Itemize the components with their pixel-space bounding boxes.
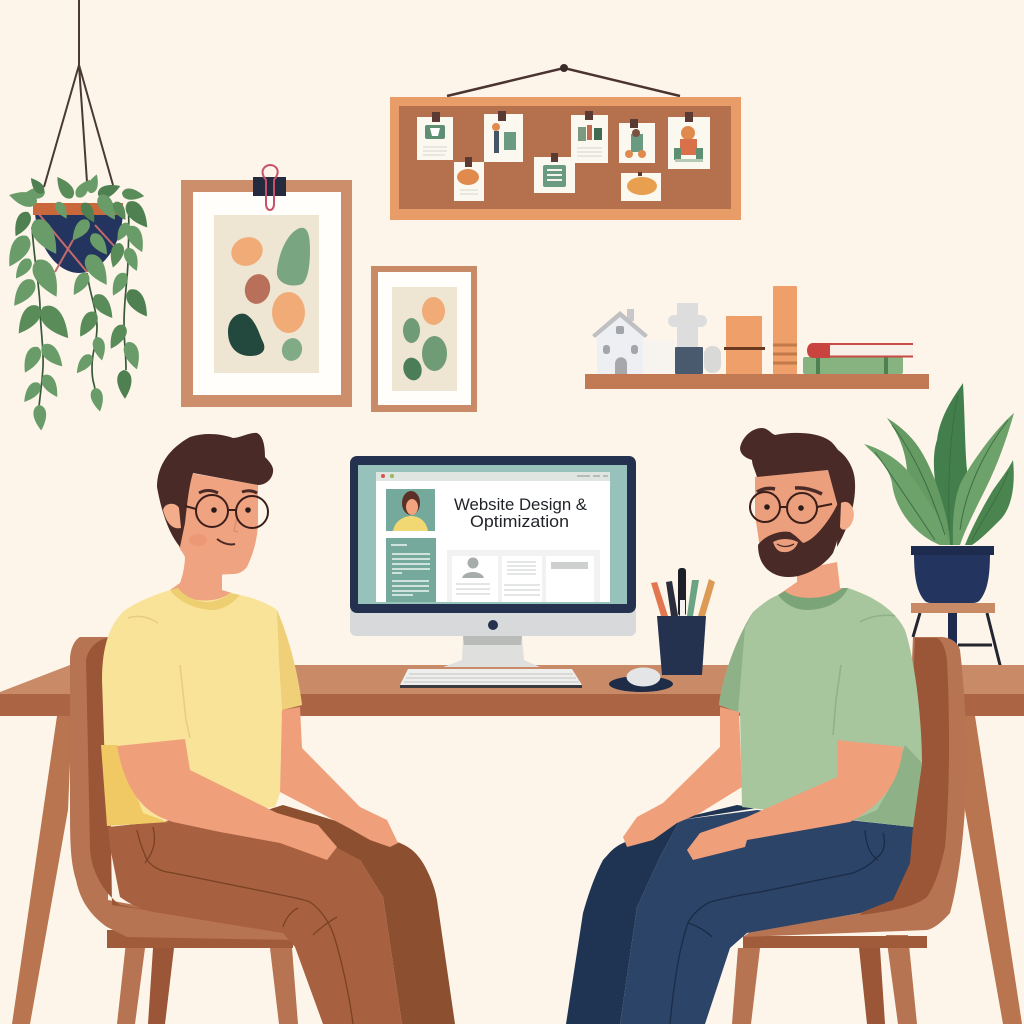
photo card 3 bbox=[454, 157, 484, 201]
cork board bbox=[390, 64, 741, 220]
plant stool bbox=[911, 603, 1002, 673]
trousers bbox=[108, 805, 455, 1024]
photo card 7 bbox=[621, 172, 661, 201]
potted plant bbox=[864, 383, 1014, 673]
photo card 4 bbox=[534, 153, 575, 193]
photo card 8 bbox=[668, 112, 710, 169]
head bbox=[157, 433, 273, 575]
tall orange box bbox=[773, 286, 797, 374]
small framed art bbox=[371, 266, 477, 412]
right chair bbox=[732, 637, 966, 1024]
green t-shirt bbox=[719, 588, 922, 827]
sculpture on cup bbox=[668, 303, 721, 374]
glasses bbox=[185, 495, 268, 528]
orange box bbox=[724, 316, 765, 374]
monitor stand bbox=[443, 636, 540, 667]
beard bbox=[758, 503, 840, 577]
hanging plant bbox=[2, 0, 154, 431]
icon: model house bbox=[592, 309, 675, 374]
large framed art bbox=[181, 165, 352, 407]
right person bbox=[566, 428, 922, 1024]
desk bbox=[0, 665, 1024, 1024]
right arm bbox=[687, 740, 903, 860]
browser window bbox=[376, 472, 610, 602]
monitor bbox=[350, 456, 636, 667]
icon: hanging pot bbox=[33, 203, 123, 273]
stacked books bbox=[803, 343, 913, 374]
monitor subtitle: Optimization bbox=[470, 512, 569, 531]
right arm bbox=[280, 707, 398, 847]
left chair bbox=[70, 637, 298, 1024]
yellow t-shirt bbox=[101, 588, 302, 826]
ear bbox=[163, 504, 181, 528]
left arm bbox=[117, 739, 337, 860]
neck bbox=[170, 555, 232, 605]
hair bbox=[740, 428, 855, 547]
photo card 2 bbox=[484, 111, 523, 162]
plant pot bbox=[911, 546, 994, 603]
neck bbox=[778, 562, 848, 610]
wall shelf with objects bbox=[585, 286, 929, 389]
photo card 5 bbox=[571, 111, 608, 163]
mouse and pad bbox=[609, 668, 673, 692]
hair bbox=[157, 433, 273, 547]
photo card 6 bbox=[619, 119, 655, 163]
content cards bbox=[447, 550, 600, 602]
glasses bbox=[750, 492, 832, 523]
left arm bbox=[623, 707, 742, 847]
left person bbox=[101, 433, 455, 1024]
monitor title: Website Design & bbox=[454, 495, 588, 514]
keyboard bbox=[400, 669, 582, 688]
icon: binder clip bbox=[253, 165, 286, 210]
profile photo bbox=[386, 489, 435, 531]
pen holder bbox=[651, 568, 715, 675]
head bbox=[740, 428, 855, 577]
ear bbox=[840, 502, 854, 530]
sidebar text panel bbox=[386, 538, 436, 602]
navy trousers bbox=[566, 805, 913, 1024]
photo card 1 bbox=[417, 112, 453, 160]
